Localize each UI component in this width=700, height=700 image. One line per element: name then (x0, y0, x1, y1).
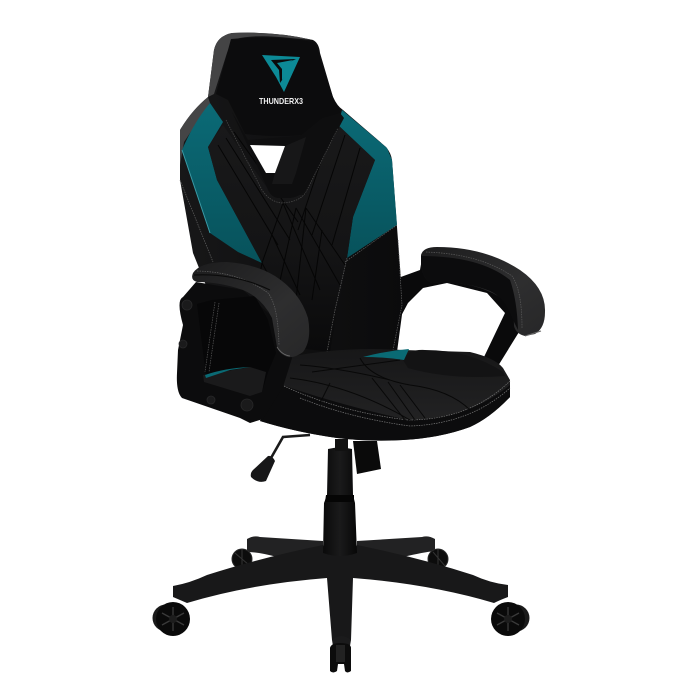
frame bolts (179, 300, 253, 411)
back side stitching (180, 180, 402, 352)
right armrest pad (421, 247, 545, 336)
gas cylinder (323, 448, 357, 556)
front caster (330, 643, 351, 672)
window opening (250, 145, 285, 173)
window frame (232, 112, 344, 198)
left front caster (152, 602, 190, 636)
logo wordmark: THUNDERX3 (259, 96, 303, 106)
back left edge highlight (180, 97, 210, 165)
logo: lightning triangle emblem (262, 55, 300, 92)
seat side band (260, 385, 510, 441)
left armrest frame (177, 282, 292, 423)
left teal seat accent (205, 367, 250, 378)
quilted stitching (218, 132, 360, 300)
base: rear star legs (247, 536, 435, 557)
height lever (251, 435, 310, 482)
seat (260, 349, 510, 441)
chair back (180, 33, 403, 362)
headrest panel (216, 38, 340, 136)
left armrest pad (192, 262, 309, 357)
seat piping stitches (284, 381, 510, 426)
inner side cushion (203, 367, 266, 396)
right arm strut (398, 253, 519, 366)
cylinder collar (325, 495, 354, 502)
cylinder top (335, 439, 348, 451)
centre back panel (208, 125, 375, 352)
teal edge highlight (182, 150, 210, 233)
seat teal accent (363, 349, 409, 360)
right front caster (491, 602, 530, 636)
seat panel seams (290, 358, 470, 420)
rear casters (232, 549, 448, 569)
front leg caster stem (332, 636, 351, 646)
window inner strut (272, 137, 306, 184)
inner panel behind armrest (197, 296, 276, 392)
tilt mechanism block (353, 441, 381, 474)
headrest left highlight (208, 33, 313, 97)
frame stitching (226, 120, 338, 203)
seat rear cushion (403, 350, 505, 377)
inner stitching (205, 302, 219, 372)
left teal panel (182, 103, 262, 263)
right teal panel (338, 110, 397, 258)
base: front star legs (173, 545, 508, 640)
